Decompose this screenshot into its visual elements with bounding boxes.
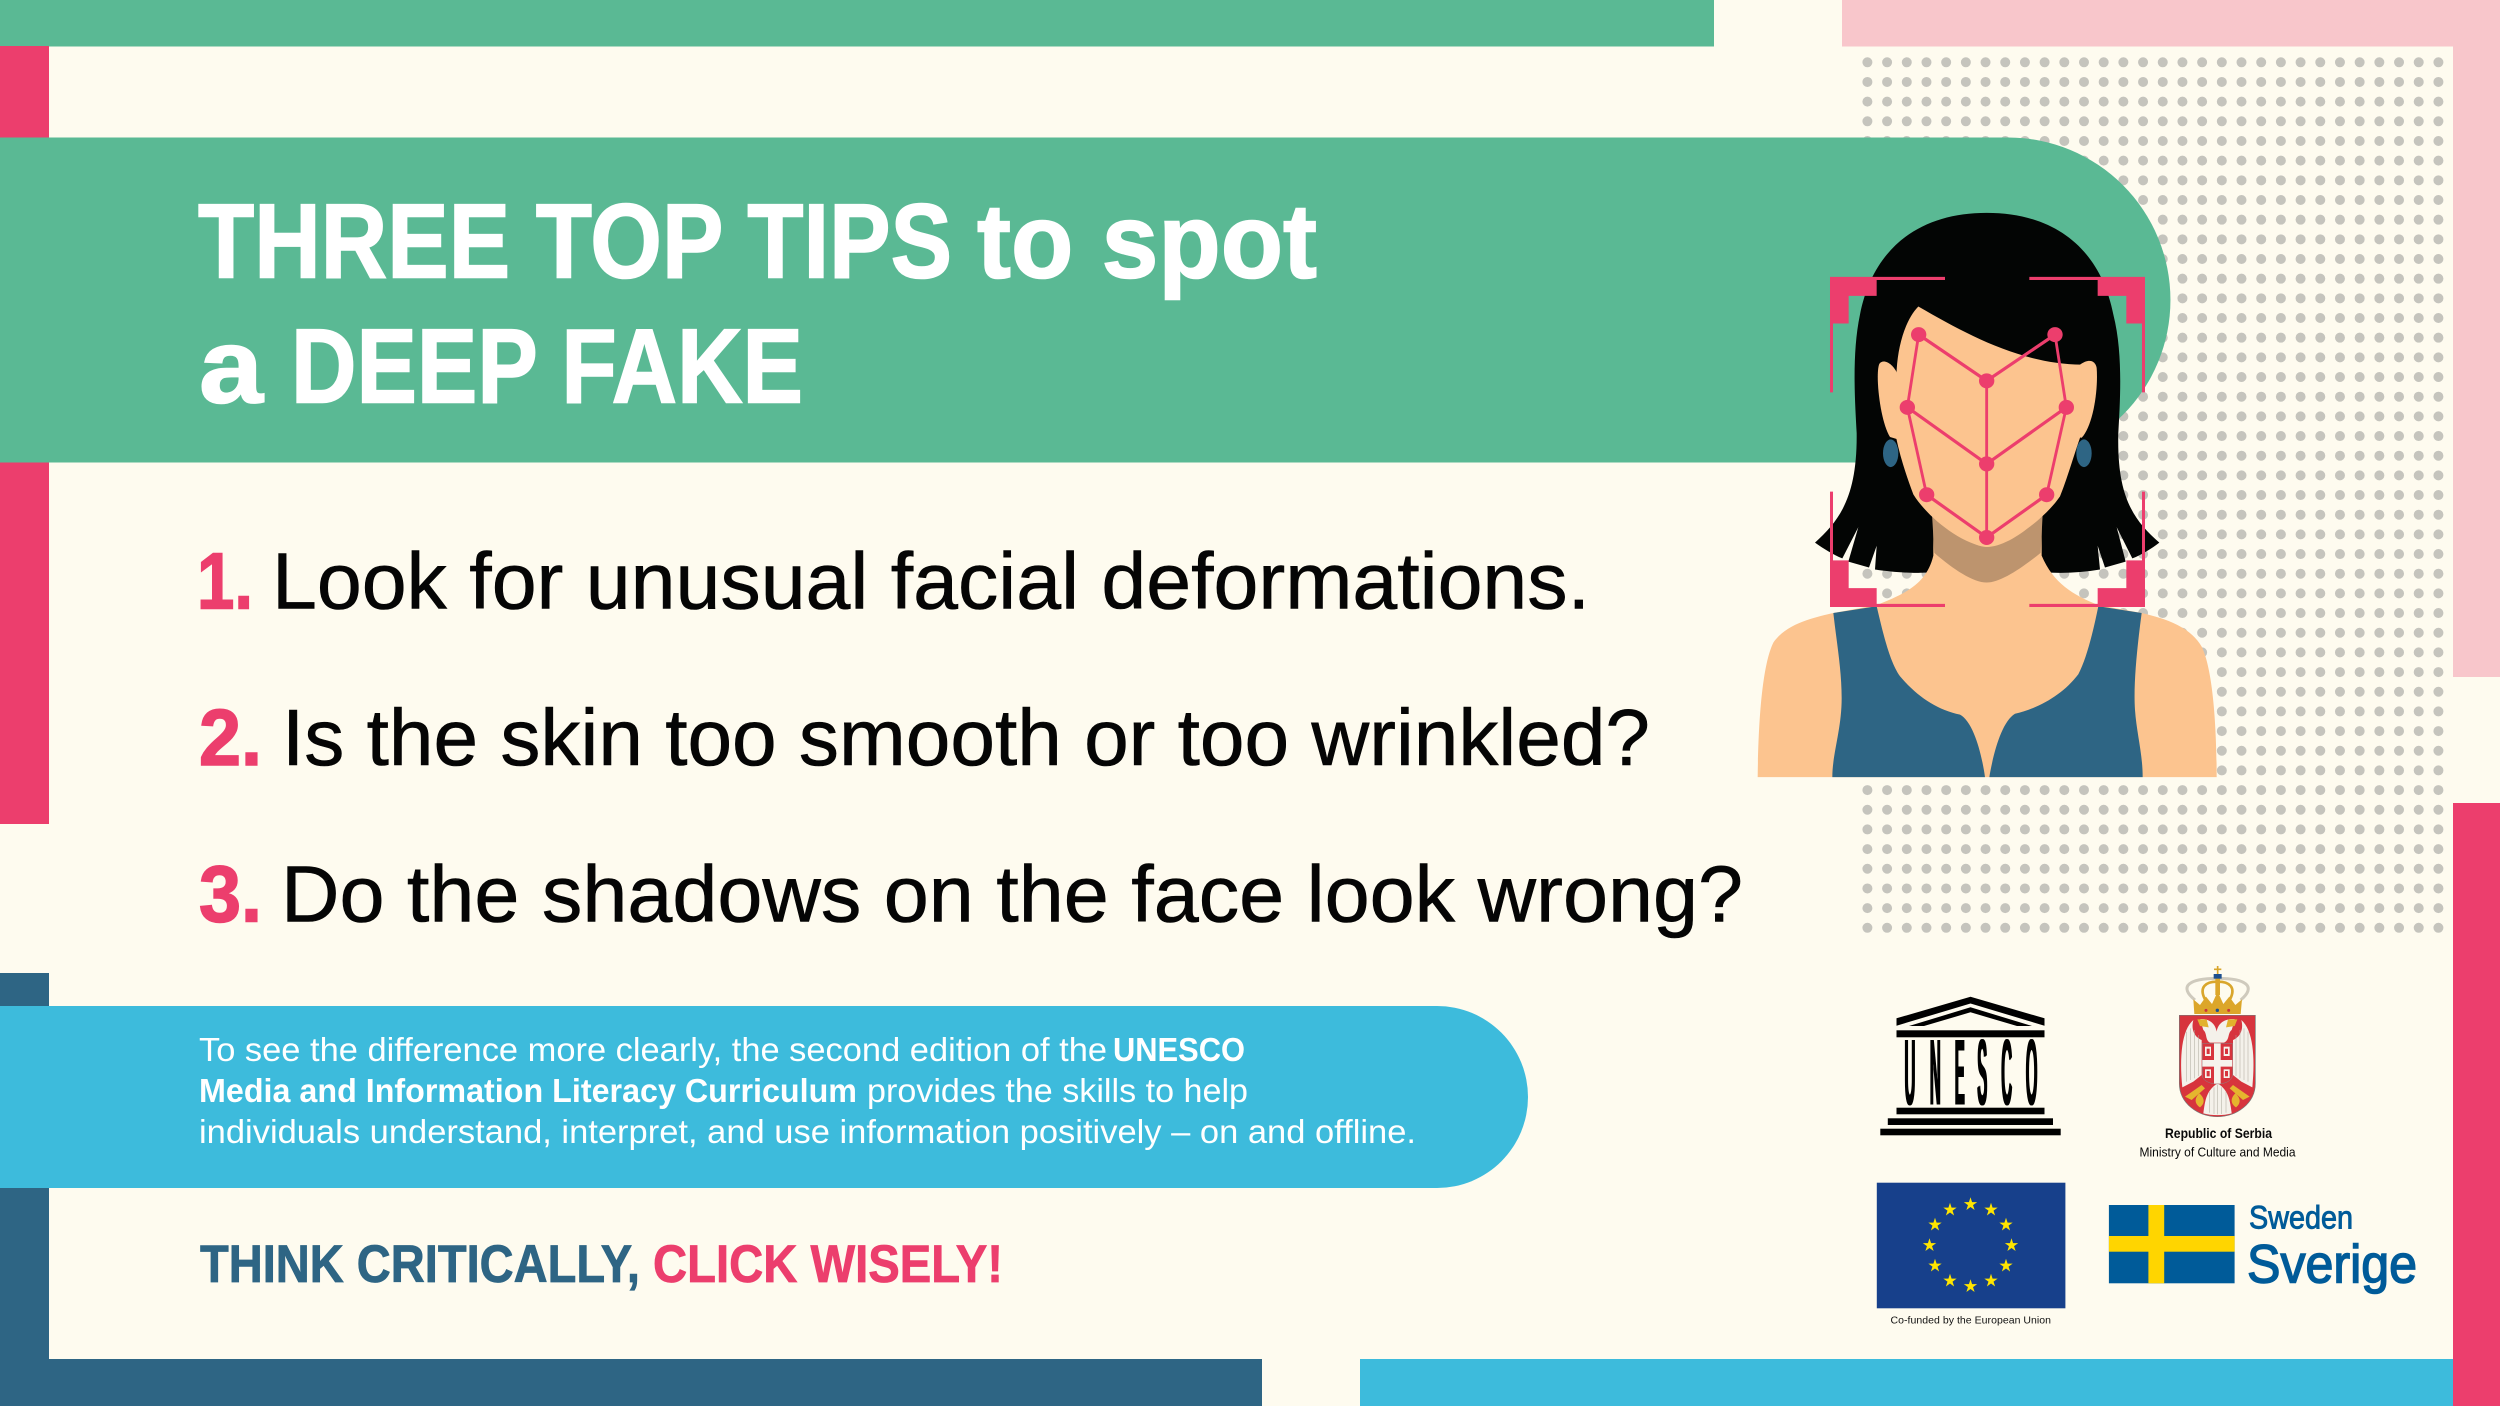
border: bottom blue bar (1360, 1359, 2453, 1406)
dot grid pattern (1867, 62, 2440, 928)
title banner (0, 138, 2170, 462)
logo: Sweden flag (2109, 1205, 2235, 1283)
logo: UNESCO: UNESCO (1904, 1021, 2037, 1125)
face (1896, 307, 2082, 547)
inner shield (2202, 1043, 2232, 1084)
scan frame corners (1830, 277, 2145, 607)
Sweden wordmark (2247, 1199, 2417, 1295)
slogan (200, 1235, 1003, 1294)
tip 1: 1. (197, 536, 253, 626)
slogan: THINK CRITICALLY, (200, 1235, 640, 1294)
tip 3: Do the shadows on the face look wrong? (281, 850, 1743, 938)
logo: Republic of Serbia coat of arms (2179, 966, 2255, 1117)
border: left pink bar (0, 46, 49, 824)
border: dark blue corner (0, 973, 1262, 1406)
tip 1: Look for unusual facial deformations. (272, 536, 1590, 626)
earrings (1883, 439, 2092, 467)
title text (198, 182, 1317, 426)
tip 3: 3. (199, 850, 262, 938)
callout text: Media and Information Literacy Curriculum (199, 1072, 857, 1109)
logo: EU flag (1877, 1183, 2065, 1308)
callout text: UNESCO (1113, 1031, 1245, 1068)
Serbia caption (2140, 1125, 2296, 1160)
shield (2179, 1015, 2255, 1117)
callout text: provides the skills to help (867, 1072, 1248, 1109)
logo: UNESCO (1880, 997, 2061, 1135)
callout text: individuals understand, interpret, and use information positively – on and offline. (199, 1113, 1416, 1150)
tips list (197, 536, 1743, 938)
dress (1832, 606, 2143, 777)
info callout pill (0, 1006, 1528, 1188)
callout text (199, 1031, 1416, 1150)
EU caption: Co-funded by the European Union (1890, 1314, 2051, 1326)
title text: DEEP FAKE (291, 308, 803, 426)
border: light pink corner (1842, 0, 2500, 677)
slogan: CLICK WISELY! (653, 1235, 1003, 1294)
eagle (2181, 1019, 2254, 1115)
hair (1815, 213, 2159, 573)
ears (1878, 361, 2097, 439)
Serbia caption: Republic of Serbia (2165, 1125, 2272, 1141)
Sweden wordmark: Sweden (2249, 1199, 2353, 1235)
tip 2: 2. (199, 693, 262, 782)
Sweden wordmark: Sverige (2247, 1235, 2417, 1295)
border: top green bar (0, 0, 1714, 46)
neck shadow (1932, 514, 2043, 583)
crown (2187, 966, 2248, 1014)
Serbia caption: Ministry of Culture and Media (2140, 1146, 2296, 1160)
title text: a (199, 308, 264, 426)
body skin (1758, 512, 2217, 777)
title text: THREE TOP TIPS (198, 182, 952, 300)
title text: to spot (977, 182, 1317, 300)
border: lower-right pink bar (2453, 803, 2500, 1406)
callout text: To see the difference more clearly, the second edition of the (199, 1031, 1107, 1068)
facial recognition mesh (1900, 327, 2074, 545)
tip 2: Is the skin too smooth or too wrinkled? (282, 693, 1650, 782)
portrait illustration with face scan (1758, 213, 2217, 777)
